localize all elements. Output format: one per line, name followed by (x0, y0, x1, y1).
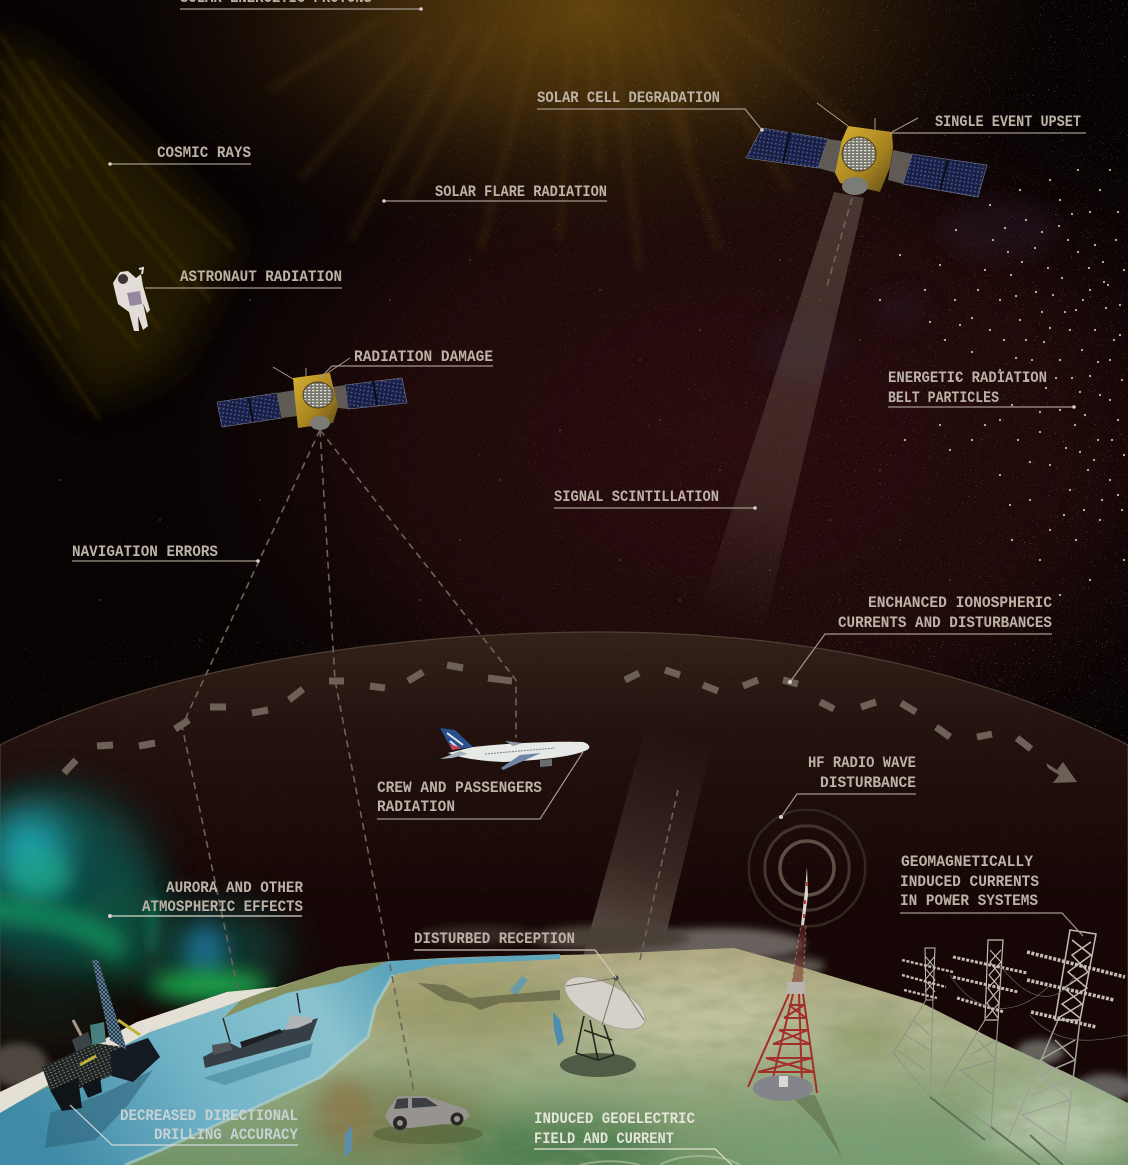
label: decreased directional drilling accuracy (70, 1105, 298, 1145)
label: radiation damage (320, 348, 493, 378)
airplane ground shadow (418, 983, 560, 1010)
solar panels (746, 128, 828, 168)
label: energetic radiation belt particles: ENERGETIC RADIATION (888, 369, 1047, 387)
label: aurora and other atmospheric effects: ATMOSPHERIC EFFECTS (142, 898, 303, 916)
geoelectric field arcs (580, 1156, 740, 1165)
pylon small (893, 948, 953, 1097)
label: induced geoelectric field and current (534, 1110, 732, 1165)
lattice legs (748, 994, 817, 1093)
land (0, 948, 1128, 1165)
label: aurora and other atmospheric effects: AURORA AND OTHER (166, 879, 303, 897)
label: astronaut radiation: ASTRONAUT RADIATION (180, 268, 342, 286)
bright star cluster (880, 170, 1124, 595)
pale shoreline (125, 975, 393, 1165)
peninsula (223, 961, 389, 1018)
label: decreased directional drilling accuracy: DECREASED DIRECTIONAL (120, 1107, 298, 1125)
radio signal rings (749, 810, 865, 926)
clouds on the horizon (0, 925, 1128, 1102)
gold body (835, 126, 893, 192)
label: induced geoelectric field and current: INDUCED GEOELECTRIC (534, 1110, 695, 1128)
pylon medium (940, 940, 1027, 1127)
label: enchanced ionospheric currents: CURRENTS AND DISTURBANCES (838, 614, 1052, 632)
terrain shading (298, 951, 1128, 1165)
label: decreased directional drilling accuracy: DRILLING ACCURACY (154, 1126, 298, 1144)
dashed signal paths (182, 198, 852, 1092)
label: geomagnetically induced currents (900, 853, 1083, 936)
label: induced geoelectric field and current: FIELD AND CURRENT (534, 1130, 674, 1148)
satellite centre left (217, 358, 407, 430)
hull (203, 1018, 318, 1068)
label: crew and passengers radiation: CREW AND PASSENGERS (377, 779, 542, 797)
fuselage (448, 742, 589, 762)
label: energetic radiation belt particles (888, 369, 1076, 409)
pylon large (1009, 930, 1125, 1165)
upper mast (791, 925, 806, 985)
sea and strait (0, 954, 560, 1165)
forward block (212, 1042, 232, 1055)
tail fin (440, 728, 473, 750)
shadow (790, 1095, 842, 1157)
label: signal scintillation: SIGNAL SCINTILLATION (554, 488, 719, 506)
right hull block (110, 1038, 160, 1082)
label: geomagnetically induced currents: IN POWER SYSTEMS (900, 892, 1038, 910)
flare boom (73, 1020, 82, 1037)
aurora (0, 790, 290, 1045)
deck (42, 1038, 160, 1095)
label: energetic radiation belt particles: BELT PARTICLES (888, 389, 999, 407)
signal beam below atmosphere (578, 730, 712, 1000)
engine (540, 759, 552, 767)
power lines (950, 965, 1128, 1040)
label: enchanced ionospheric currents: ENCHANCED IONOSPHERIC (868, 594, 1052, 612)
superstructure (285, 1015, 313, 1030)
label: solar cell degradation (537, 89, 764, 132)
sun glow at top (0, 0, 1128, 280)
label: aurora and other atmospheric effects (108, 879, 303, 918)
cosmic ray streaks (0, 30, 237, 420)
antennas (817, 103, 918, 132)
reflection (203, 1043, 313, 1085)
icon: satellite dish (557, 966, 653, 1077)
arrowhead (1046, 762, 1077, 783)
label: radiation damage: RADIATION DAMAGE (354, 348, 493, 366)
faint stars (60, 260, 1100, 870)
label: hf radio wave disturbance (779, 754, 916, 819)
legs (50, 1077, 102, 1111)
near wing (501, 753, 541, 770)
label: navigation errors: NAVIGATION ERRORS (72, 543, 218, 561)
antenna spike (801, 867, 808, 925)
icon: astronaut (113, 268, 150, 331)
signal beam from satellite to atmosphere (695, 192, 864, 625)
label: disturbed reception (414, 930, 616, 978)
icon: car (373, 1096, 483, 1144)
label: hf radio wave disturbance: DISTURBANCE (820, 774, 916, 792)
label: single event upset: SINGLE EVENT UPSET (935, 113, 1081, 131)
accommodation module (90, 1022, 106, 1045)
label: solar cell degradation: SOLAR CELL DEGRADATION (537, 89, 720, 107)
icon: airplane (440, 728, 589, 770)
label: solar flare radiation: SOLAR FLARE RADIATION (435, 183, 607, 201)
star specks in atmosphere (0, 640, 1128, 960)
label: crew and passengers radiation (377, 752, 583, 819)
label: geomagnetically induced currents: INDUCED CURRENTS (900, 873, 1039, 891)
lakes (510, 976, 528, 996)
lower cylinder (842, 177, 868, 195)
curved dashed current arrow (64, 665, 1077, 783)
snowy coast (0, 987, 277, 1113)
base building (753, 1075, 813, 1101)
earth surface (0, 940, 1128, 1165)
power pylons (893, 930, 1128, 1165)
derrick (92, 960, 127, 1050)
cargo deck (240, 1029, 283, 1048)
label: crew and passengers radiation: RADIATION (377, 798, 455, 816)
icon: oil platform (42, 960, 160, 1148)
shadow on water (45, 1070, 153, 1148)
pylon shadows (930, 1097, 1063, 1165)
far wing (505, 741, 523, 746)
label: enchanced ionospheric currents (788, 594, 1052, 684)
label: solar energetic protons (180, 0, 423, 11)
label: solar flare radiation (382, 183, 607, 203)
windows (485, 748, 555, 754)
label: cosmic rays (108, 144, 251, 166)
label: cosmic rays: COSMIC RAYS (157, 144, 251, 162)
yellow crane (80, 1020, 140, 1065)
icon: ship (203, 993, 318, 1085)
label: hf radio wave disturbance: HF RADIO WAVE (808, 754, 916, 772)
icon: radio tower (748, 867, 842, 1157)
dish (842, 137, 876, 171)
tailplane (440, 751, 468, 759)
masts (223, 993, 300, 1042)
satellite upper right (746, 103, 987, 197)
label: geomagnetically induced currents: GEOMAGNETICALLY (901, 853, 1033, 871)
faint star dust (0, 0, 1128, 742)
milky way haze (755, 200, 1060, 380)
label: disturbed reception: DISTURBED RECEPTION (414, 930, 575, 948)
atmosphere dome (0, 632, 1128, 1165)
